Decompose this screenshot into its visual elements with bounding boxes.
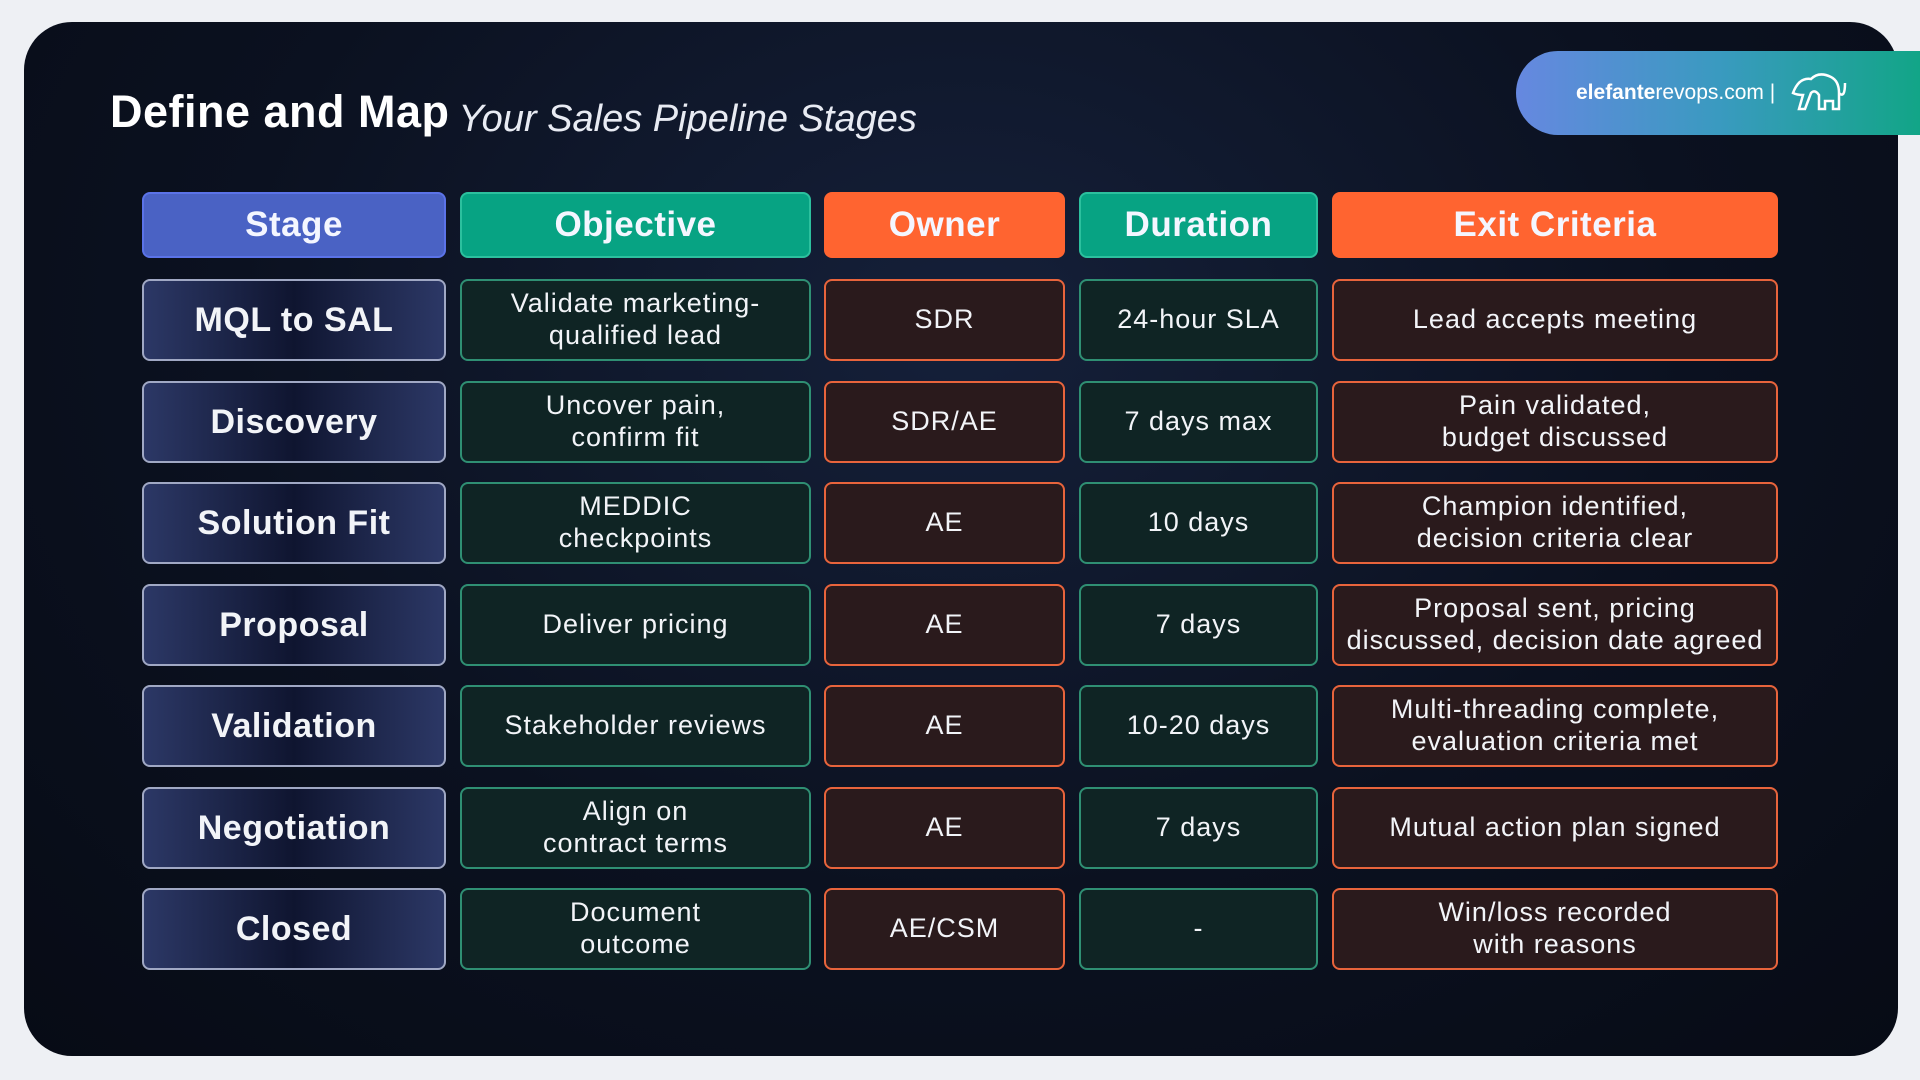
row: Validation xyxy=(142,685,1778,767)
row: Negotiation xyxy=(142,787,1778,869)
text: Proposal sent, pricing xyxy=(1414,593,1696,623)
text: discussed, decision date agreed xyxy=(1347,625,1763,655)
row: Solution Fit xyxy=(142,482,1778,564)
row: MQL to SAL xyxy=(142,279,1778,361)
icon: elephant xyxy=(1792,73,1846,110)
row: Discovery xyxy=(142,381,1778,463)
text: AE xyxy=(925,710,964,740)
text: 7 days xyxy=(1156,812,1241,842)
text: decision criteria clear xyxy=(1417,523,1693,553)
text: outcome xyxy=(580,929,691,959)
text: Discovery xyxy=(210,403,378,441)
text: AE xyxy=(925,609,964,639)
text: Closed xyxy=(236,910,352,948)
row: Proposal xyxy=(142,584,1778,666)
text: budget discussed xyxy=(1442,422,1668,452)
text: Solution Fit xyxy=(198,504,390,542)
text: Negotiation xyxy=(198,809,390,847)
text: 7 days xyxy=(1156,609,1241,639)
header: Duration: Duration xyxy=(1125,205,1272,244)
text: Multi-threading complete, xyxy=(1391,694,1719,724)
text: Win/loss recorded xyxy=(1438,897,1672,927)
header row xyxy=(142,192,1778,258)
text: Proposal xyxy=(219,606,369,644)
text: Document xyxy=(570,897,701,927)
text: Champion identified, xyxy=(1422,491,1688,521)
badge: elefanterevops.com xyxy=(1516,51,1920,135)
text: Stakeholder reviews xyxy=(504,710,767,740)
header: Owner: Owner xyxy=(889,205,1000,244)
text: Validation xyxy=(211,707,377,745)
text: 24-hour SLA xyxy=(1117,304,1280,334)
text: AE xyxy=(925,812,964,842)
header: Stage: Stage xyxy=(245,205,343,244)
badge: elefanterevops.com: elefanterevops.com | xyxy=(1576,81,1775,104)
header: Owner xyxy=(824,192,1065,258)
text: Pain validated, xyxy=(1459,390,1651,420)
text: MEDDIC xyxy=(579,491,692,521)
text: Validate marketing- xyxy=(511,288,760,318)
title: Define and Map Your Sales Pipeline Stages xyxy=(110,86,917,140)
header: Exit Criteria xyxy=(1332,192,1778,258)
text: AE/CSM xyxy=(890,913,999,943)
text: Uncover pain, xyxy=(546,390,725,420)
text: SDR/AE xyxy=(891,406,998,436)
text: contract terms xyxy=(543,828,728,858)
text: SDR xyxy=(914,304,974,334)
text: MQL to SAL xyxy=(195,301,393,339)
text: AE xyxy=(925,507,964,537)
text: - xyxy=(1194,913,1204,943)
header: Duration xyxy=(1079,192,1318,258)
header: Objective: Objective xyxy=(554,205,717,244)
header: Exit Criteria: Exit Criteria xyxy=(1454,205,1656,244)
text: evaluation criteria met xyxy=(1411,726,1699,756)
text: checkpoints xyxy=(559,523,712,553)
text: Mutual action plan signed xyxy=(1389,812,1721,842)
row: Closed xyxy=(142,888,1778,970)
header: Objective xyxy=(460,192,811,258)
text: 7 days max xyxy=(1124,406,1273,436)
text: 10-20 days xyxy=(1127,710,1270,740)
text: 10 days xyxy=(1148,507,1249,537)
text: Align on xyxy=(583,796,688,826)
text: with reasons xyxy=(1473,929,1637,959)
text: qualified lead xyxy=(549,320,722,350)
header: Stage xyxy=(142,192,446,258)
text: Deliver pricing xyxy=(542,609,729,639)
text: Lead accepts meeting xyxy=(1413,304,1697,334)
text: confirm fit xyxy=(571,422,700,452)
